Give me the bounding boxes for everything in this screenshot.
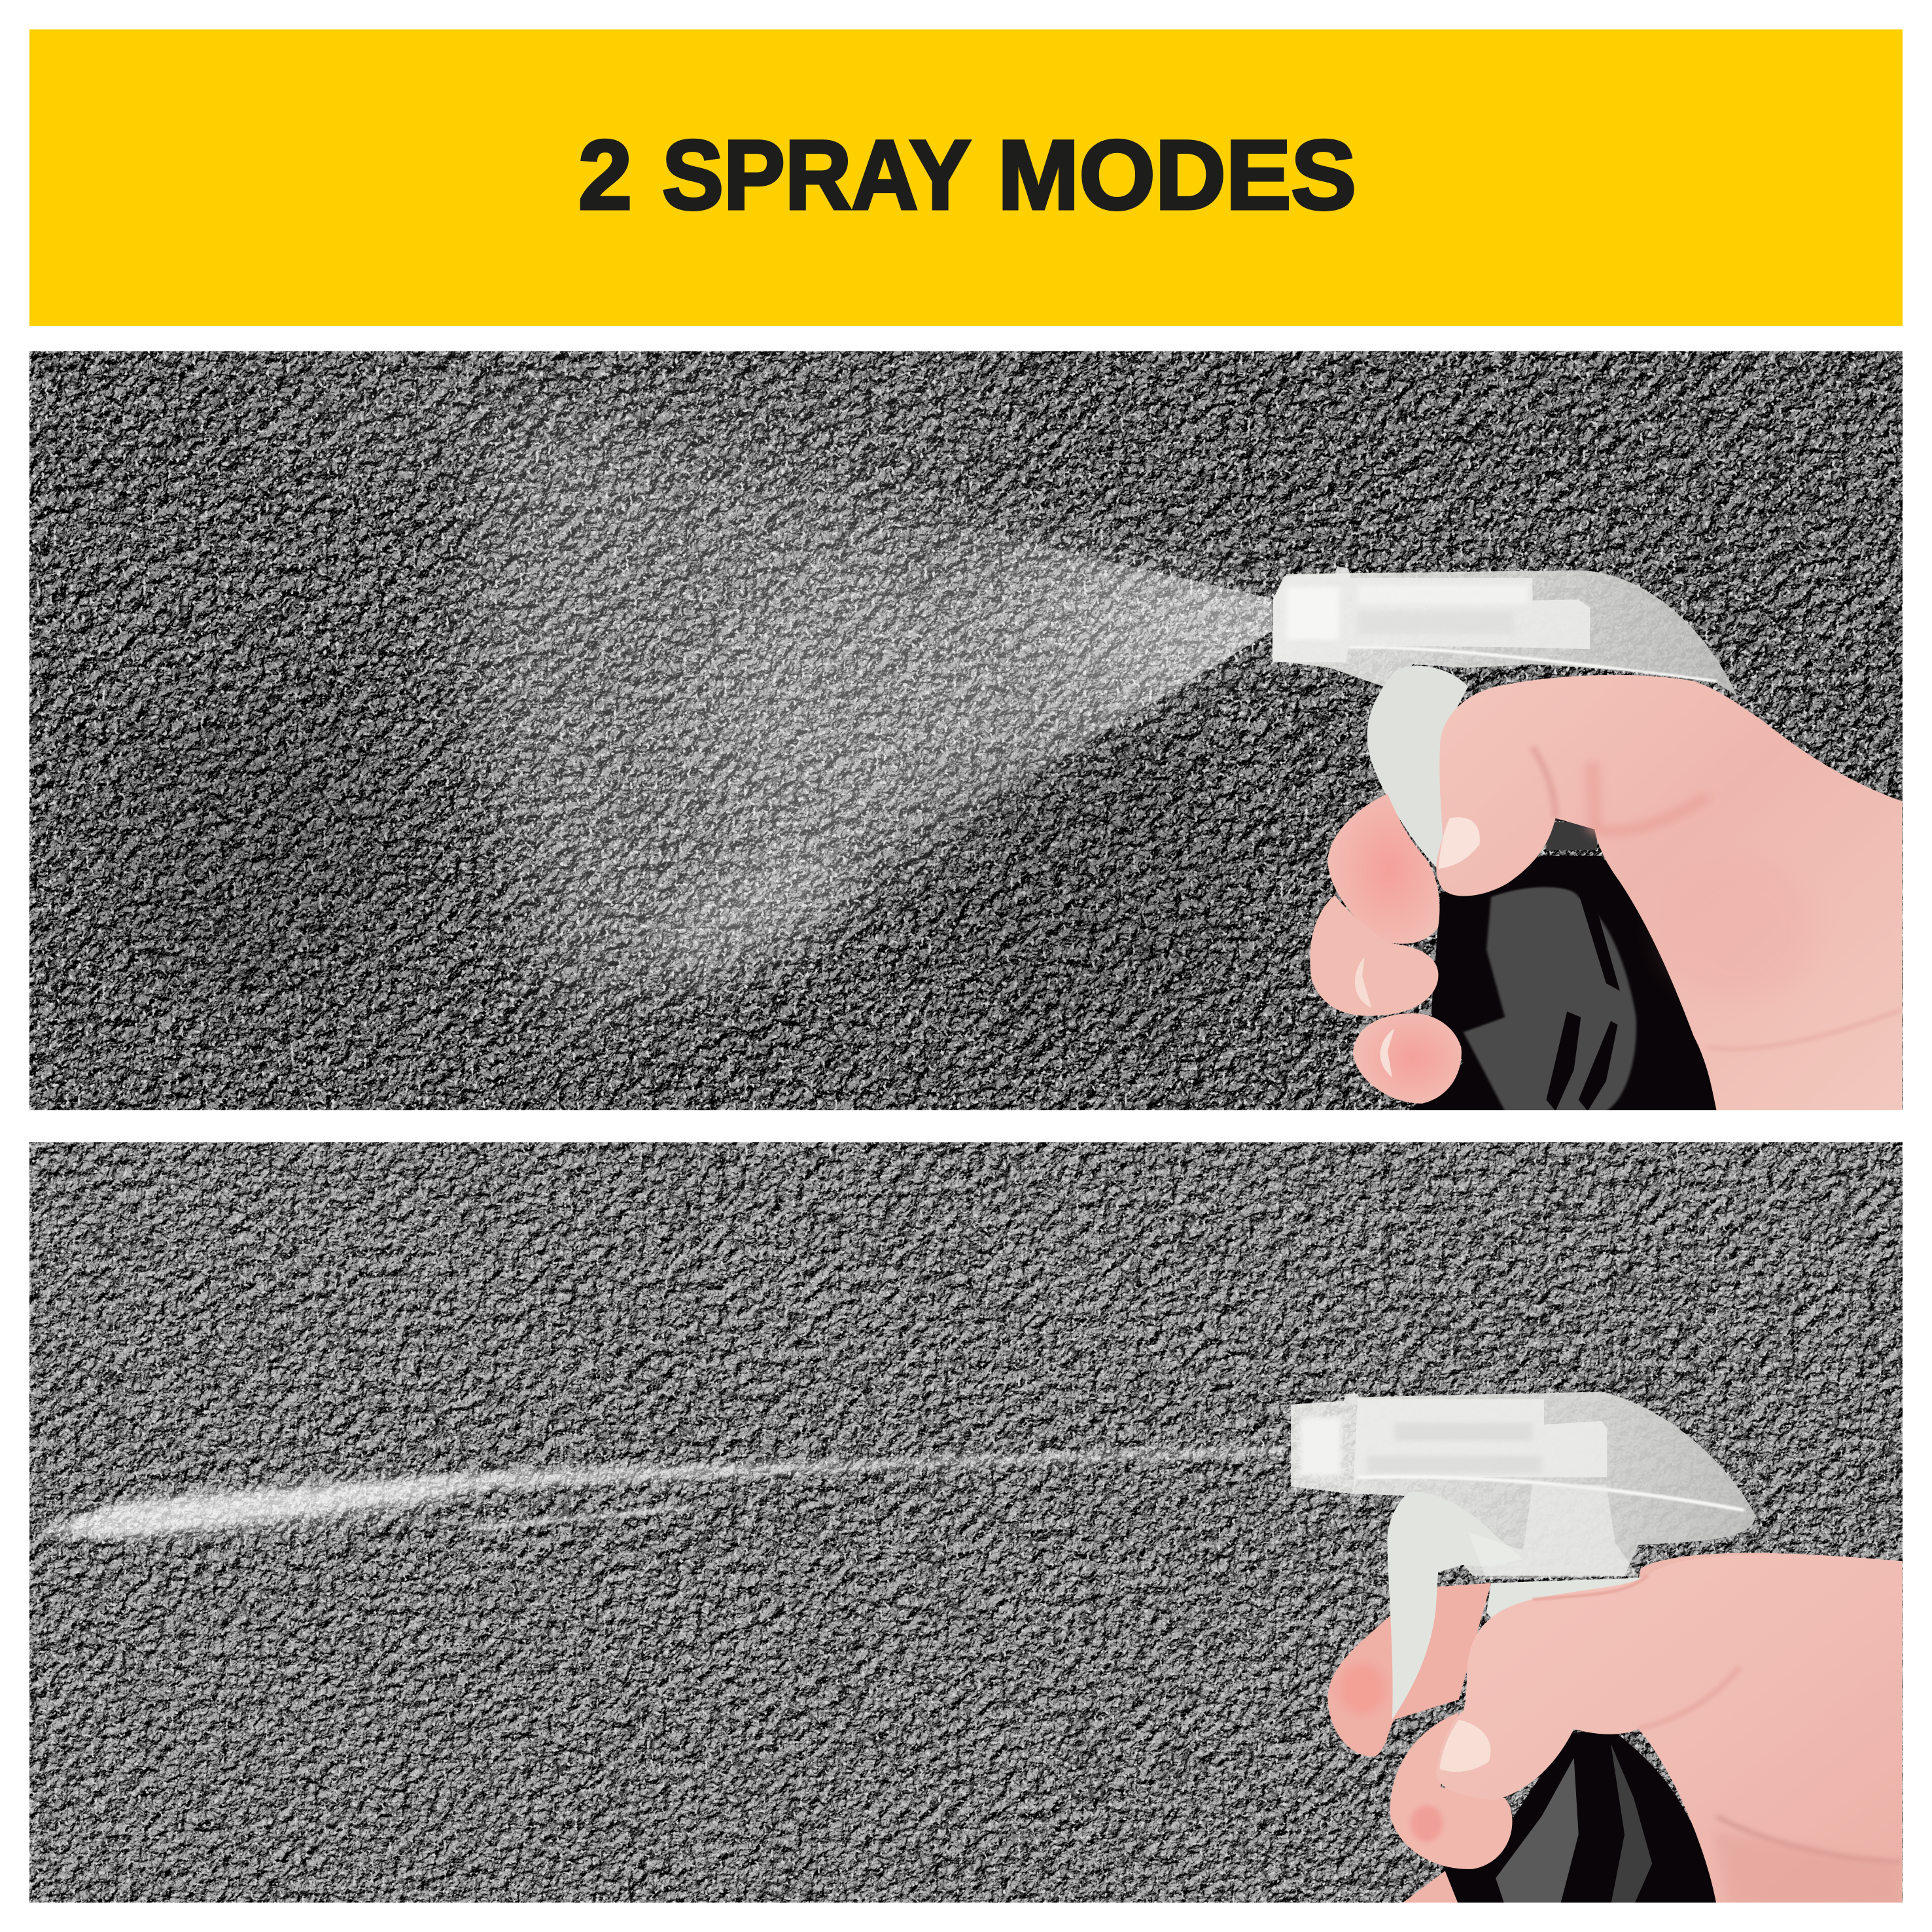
collar [1486,1577,1647,1623]
trigger [1367,666,1468,867]
title banner [29,29,1903,326]
nozzle [1273,567,1590,662]
back of hand behind collar [1625,1553,1902,1652]
rear finger [1327,1583,1491,1757]
hand [1436,675,1902,1111]
heading: 2 [578,120,632,230]
trigger shroud [1353,1392,1756,1576]
mist cone [458,432,1272,1021]
hand [1436,1554,1902,1905]
sprayer and hand: top [1273,567,1902,1111]
fingertip glow [1339,1663,1385,1714]
pump column [1468,1484,1638,1579]
heading: SPRAY [662,120,971,230]
bottle [1441,1732,1721,1905]
hand shading [1438,746,1902,1049]
panel: mist spray mode photo [29,351,1903,1110]
lower finger [1390,1712,1512,1905]
fingers [1310,794,1462,1104]
hand shading [1439,1576,1902,1905]
trigger shroud [1273,571,1737,696]
nozzle detail [1300,1417,1744,1510]
asphalt texture [29,351,1903,1110]
nozzle [1291,1394,1607,1494]
heading [578,120,1356,230]
trigger [1387,1492,1523,1719]
panel: jet stream mode photo [0,1106,1932,1932]
nozzle detail [1286,586,1717,681]
bottle [1408,822,1721,1111]
asphalt texture [0,1106,1932,1932]
tonal variation [105,360,1250,1034]
sprayer and hand: bottom [1291,1392,1902,1905]
jet stream [33,1446,1288,1549]
heading: MODES [998,120,1356,230]
